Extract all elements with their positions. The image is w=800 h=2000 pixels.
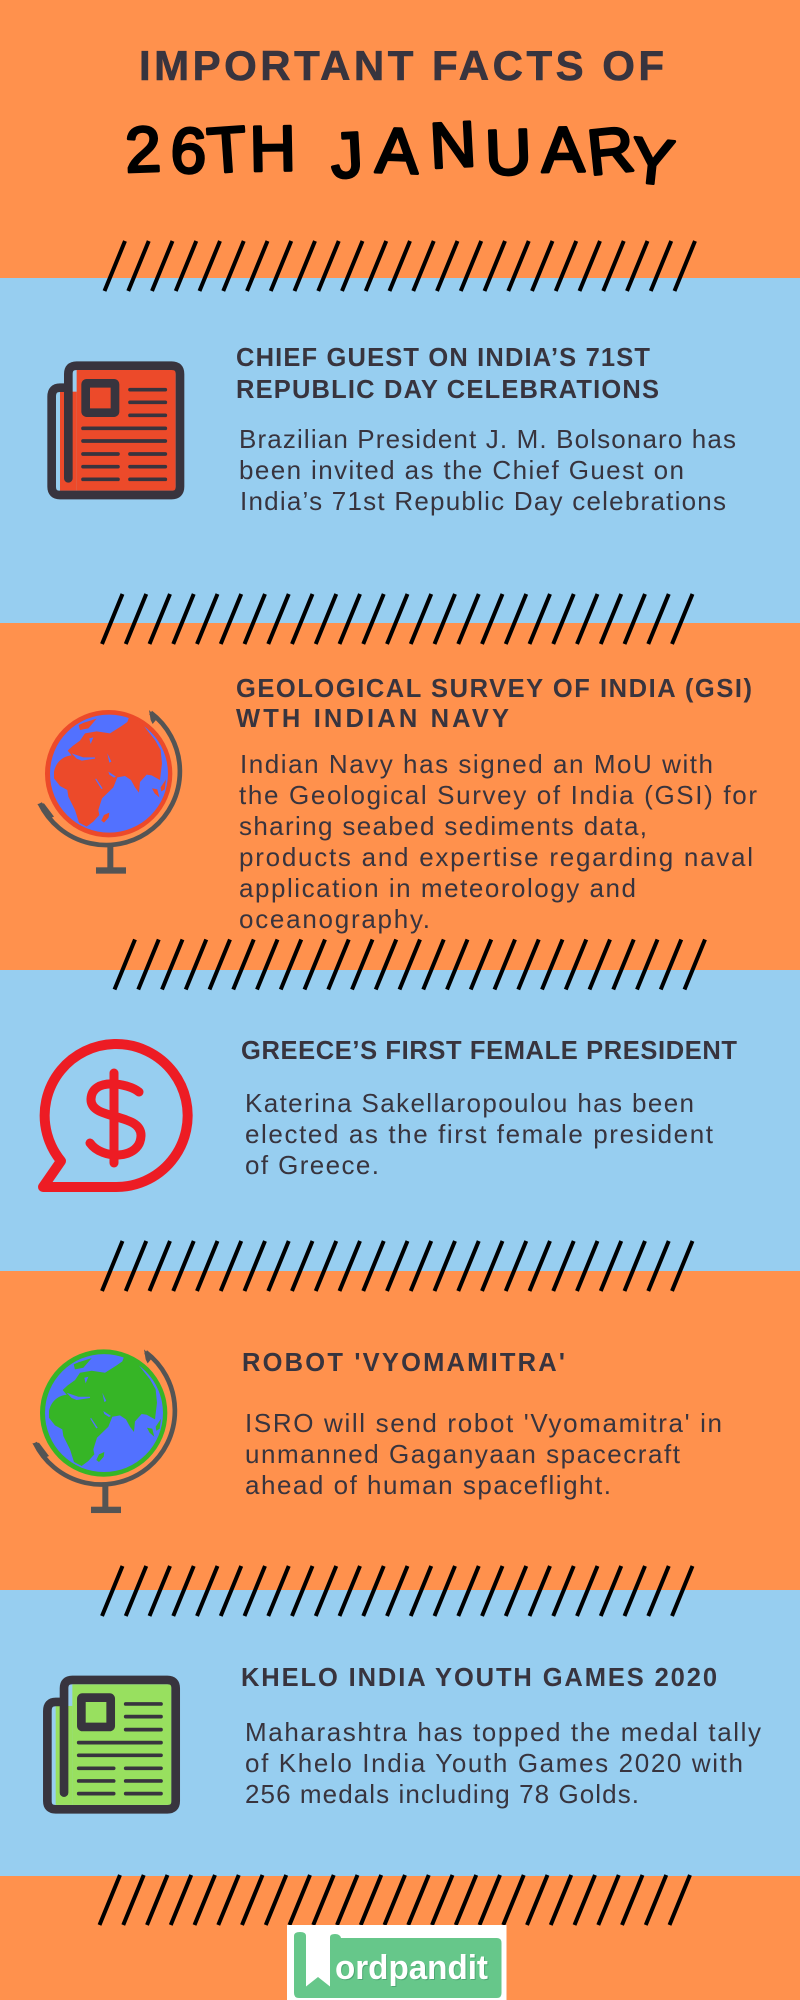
icon: red globe	[37, 710, 180, 874]
text block: Brazilian President J. M. Bolsonaro has	[239, 424, 736, 454]
heading: REPUBLIC DAY CELEBRATIONS	[236, 376, 659, 404]
panel: first female president	[0, 970, 800, 1271]
text block	[245, 1408, 722, 1500]
text block: of Khelo India Youth Games 2020 with	[245, 1748, 743, 1778]
panel: title header	[0, 0, 800, 278]
text block: unmanned Gaganyaan spacecraft	[245, 1439, 681, 1469]
heading: KHELO INDIA YOUTH GAMES 2020	[241, 1664, 717, 1692]
text block: elected as the first female president	[245, 1119, 714, 1149]
icon: green newspaper	[47, 1680, 176, 1809]
divider hatch 4	[102, 1241, 692, 1291]
divider hatch 2	[102, 594, 692, 644]
text block: India’s 71st Republic Day celebrations	[240, 486, 726, 516]
text block: application in meteorology and	[239, 873, 636, 903]
heading: CHIEF GUEST ON INDIA’S 71ST	[236, 344, 650, 372]
panel: footer	[0, 1876, 800, 2000]
heading: ROBOT 'VYOMAMITRA'	[242, 1349, 565, 1377]
text block	[239, 749, 757, 934]
divider hatch 3	[114, 940, 705, 990]
text block: Katerina Sakellaropoulou has been	[245, 1088, 694, 1118]
text block: Maharashtra has topped the medal tally	[245, 1717, 761, 1747]
panel: robot vyomamitra	[0, 1271, 800, 1590]
text block: products and expertise regarding naval	[239, 842, 753, 872]
icon: red newspaper	[52, 366, 180, 495]
divider hatch 5	[102, 1566, 692, 1616]
heading: WTH INDIAN NAVY	[236, 705, 509, 733]
heading	[236, 344, 659, 404]
heading	[236, 675, 752, 733]
text block: 256 medals including 78 Golds.	[245, 1779, 639, 1809]
text block: Indian Navy has signed an MoU with	[240, 749, 713, 779]
text block	[245, 1717, 761, 1809]
text block: been invited as the Chief Guest on	[239, 455, 684, 485]
title: 26th January: 26TH JANUARY	[124, 108, 678, 199]
icon: green globe	[32, 1349, 175, 1513]
panel: geological survey	[0, 623, 800, 970]
text block	[239, 424, 736, 516]
logo: wordpandit: ordpandit	[335, 1949, 488, 1987]
text block	[245, 1088, 714, 1180]
text block: the Geological Survey of India (GSI) for	[239, 780, 757, 810]
text block: sharing seabed sediments data,	[239, 811, 647, 841]
divider hatch 1	[104, 241, 695, 291]
divider hatch 6	[100, 1875, 690, 1925]
heading: important facts of: IMPORTANT FACTS OF	[139, 42, 664, 89]
heading: GEOLOGICAL SURVEY OF INDIA (GSI)	[236, 675, 752, 703]
text block: oceanography.	[239, 904, 430, 934]
heading: GREECE’S FIRST FEMALE PRESIDENT	[241, 1037, 737, 1065]
icon: dollar speech bubble	[43, 1044, 188, 1187]
panel: khelo india	[0, 1590, 800, 1876]
text block: ahead of human spaceflight.	[245, 1470, 611, 1500]
logo: wordpandit	[287, 1925, 506, 2000]
text block: of Greece.	[245, 1150, 379, 1180]
panel: chief guest	[0, 278, 800, 623]
text block: ISRO will send robot 'Vyomamitra' in	[245, 1408, 722, 1438]
